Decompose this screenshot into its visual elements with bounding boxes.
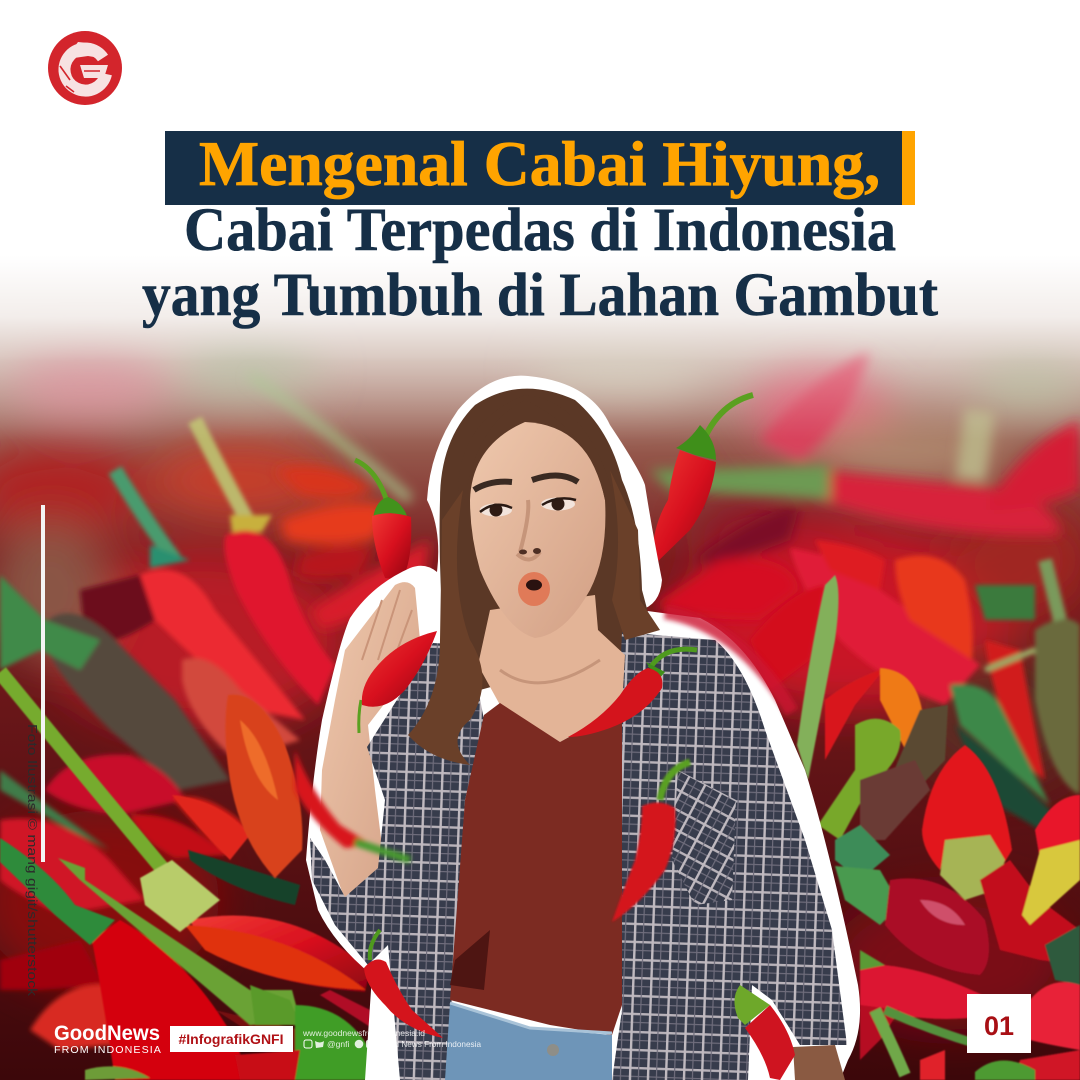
eyes [480, 504, 512, 516]
vertical white rule [41, 505, 45, 862]
footer: website and social handles: Good News From Indonesia [379, 1039, 481, 1049]
hair back [410, 389, 650, 760]
flying chili: blurred at shirt pocket [612, 762, 690, 922]
flying chili: lower left [364, 930, 443, 1038]
title line 1: Mengenal Cabai Hiyung, [199, 128, 880, 199]
face [470, 422, 605, 638]
footer: GoodNews logo text: GoodNews [54, 1022, 160, 1045]
woman with white sticker outline [306, 376, 860, 1080]
foreground left chilies [0, 672, 375, 1080]
right mid blur chilies [750, 540, 1080, 830]
title line 2: Cabai Terpedas di Indonesia [184, 197, 896, 264]
mouth [518, 572, 550, 606]
fringe hair [458, 395, 612, 500]
red blur covering the right shoulder outline [665, 612, 792, 712]
title banner [165, 128, 915, 205]
title line 3: yang Tumbuh di Lahan Gambut [142, 262, 939, 329]
footer: website and social handles: www.goodnewsfromindonesia.id [302, 1028, 425, 1038]
brows [474, 482, 512, 490]
left arm and hand [320, 582, 420, 900]
footer: website and social handles [302, 1028, 481, 1049]
footer: hashtag box [170, 1026, 293, 1052]
shirt pocket [672, 770, 736, 905]
jeans [445, 1003, 612, 1080]
flying chili: top left behind woman [355, 460, 411, 580]
logo: GNFI round emblem [48, 31, 122, 105]
footer: website and social handles: @gnfi [327, 1039, 349, 1049]
footer: hashtag box: #InfografikGNFI [178, 1031, 284, 1047]
footer: GoodNews logo text [54, 1022, 162, 1056]
left chilies [115, 470, 175, 560]
hair side strands [408, 490, 482, 765]
footer: GoodNews logo text: FROM INDONESIA [54, 1045, 162, 1056]
foreground right chilies [797, 575, 1080, 1080]
nose [517, 500, 540, 560]
flying chili: at hand [359, 631, 437, 733]
fingers detail [362, 590, 412, 670]
maroon top [450, 703, 622, 1035]
white sticker outline [306, 376, 860, 1080]
shirt right panel and sleeve [612, 632, 847, 1080]
flying chili: blurred at elbow [295, 750, 410, 860]
blurred far chilies [0, 344, 1080, 1030]
page number box [967, 994, 1031, 1053]
shirt left panel [310, 643, 484, 1080]
page number box: 01 [984, 1011, 1014, 1041]
photo credit: Foto Ilustrasi © mang gigit/shutterstock [25, 724, 40, 997]
flying chili: at chest [568, 649, 697, 737]
white fade at the top of the page [0, 0, 1080, 440]
right forearm [793, 1045, 845, 1080]
neck and chest [478, 595, 625, 742]
flying chili: top right behind woman [653, 395, 753, 566]
flying chili: lower right [734, 985, 795, 1080]
